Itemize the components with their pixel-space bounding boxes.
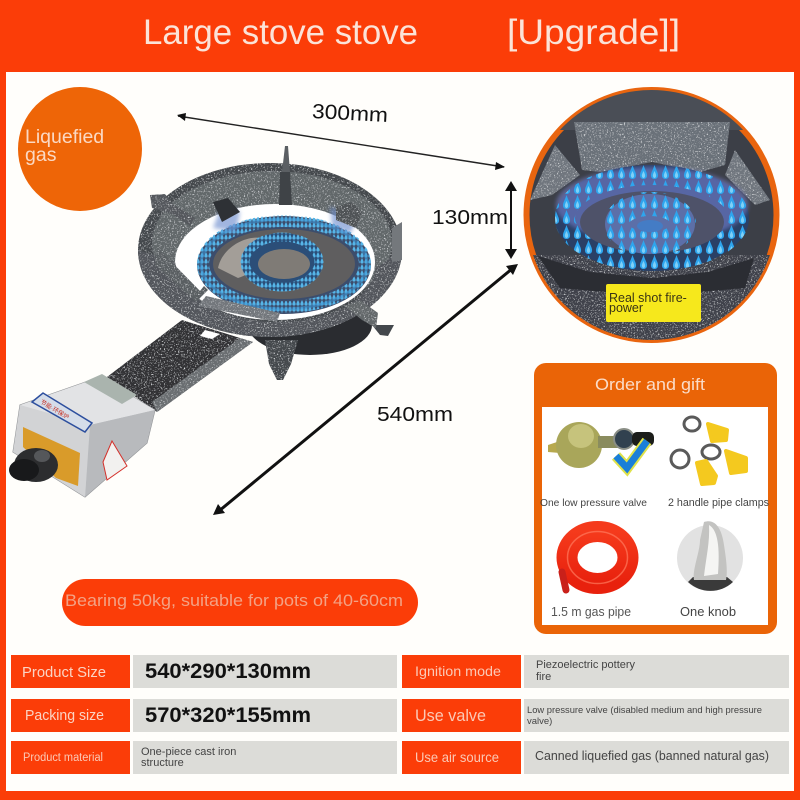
title: Large stove stove — [143, 13, 418, 52]
badge: liquefied gas: Liquefied — [25, 126, 104, 148]
row: use valve: Low pressure valve (disabled medium and high pressure — [527, 705, 762, 716]
row: use air source: Use air source — [415, 749, 499, 765]
dimension arrow: 300mm — [177, 100, 505, 170]
yellow caption: real shot — [606, 284, 701, 322]
row: product material: Product material — [23, 752, 103, 764]
row: product material: One-piece cast iron — [141, 746, 236, 758]
gift: knob: One knob — [680, 604, 736, 619]
dimension arrow: 130mm: 130mm — [432, 206, 508, 229]
yellow caption: real shot: power — [609, 301, 643, 315]
row: use valve — [402, 699, 789, 732]
stove ring — [138, 163, 402, 337]
row: ignition mode — [402, 655, 789, 688]
row: use valve: valve) — [527, 716, 552, 727]
dimension arrow: 540mm — [213, 264, 518, 515]
row: product size — [11, 655, 397, 688]
gift: low pressure valve — [540, 422, 654, 509]
knob — [9, 448, 58, 482]
row: ignition mode: Piezoelectric pottery — [536, 659, 636, 671]
gift: gas pipe — [551, 532, 631, 619]
row: product size: 540*290*130mm — [145, 660, 311, 683]
gift heading: Order and gift — [595, 376, 705, 394]
gift: knob — [677, 521, 743, 619]
spec table — [11, 655, 789, 774]
row: use air source — [402, 741, 789, 774]
control box: 节能·环保炉 — [39, 398, 71, 421]
dimension arrow: 540mm: 540mm — [377, 403, 453, 426]
burner with flames — [197, 204, 371, 314]
stove handle tube — [107, 320, 253, 412]
dimension arrow: 130mm — [432, 181, 517, 259]
callout: bearing 50kg — [62, 579, 418, 626]
gift: gas pipe: 1.5 m gas pipe — [551, 605, 631, 619]
title — [143, 13, 680, 52]
row: packing size: Packing size — [25, 708, 104, 724]
row: product size: Product Size — [22, 664, 106, 681]
badge: liquefied gas — [18, 87, 142, 211]
row: product material: structure — [141, 757, 184, 769]
row: packing size: 570*320*155mm — [145, 704, 311, 727]
row: ignition mode: fire — [536, 671, 551, 683]
gift: low pressure valve: One low pressure valve — [540, 498, 647, 509]
row: packing size — [11, 699, 397, 732]
dimension arrow: 300mm: 300mm — [311, 100, 389, 127]
yellow caption: real shot: Real shot fire- — [609, 291, 687, 305]
title: [Upgrade]] — [507, 13, 680, 52]
row: use air source: Canned liquefied gas (banned natural gas) — [535, 749, 769, 763]
panel: order and gift — [534, 363, 777, 634]
flame close-up photo — [525, 85, 780, 350]
row: ignition mode: Ignition mode — [415, 663, 501, 679]
stove feet — [248, 295, 394, 380]
gift: pipe clamps: 2 handle pipe clamps — [668, 497, 769, 509]
product photo: gas stove — [9, 146, 402, 497]
row: product material — [11, 741, 397, 774]
badge: liquefied gas: gas — [25, 144, 57, 166]
gift: pipe clamps — [668, 417, 769, 509]
control box — [9, 374, 155, 497]
callout: bearing 50kg: Bearing 50kg, suitable for pots of 40-60cm — [65, 592, 403, 610]
row: use valve: Use valve — [415, 706, 486, 725]
stove ring front and pot supports — [138, 146, 402, 337]
